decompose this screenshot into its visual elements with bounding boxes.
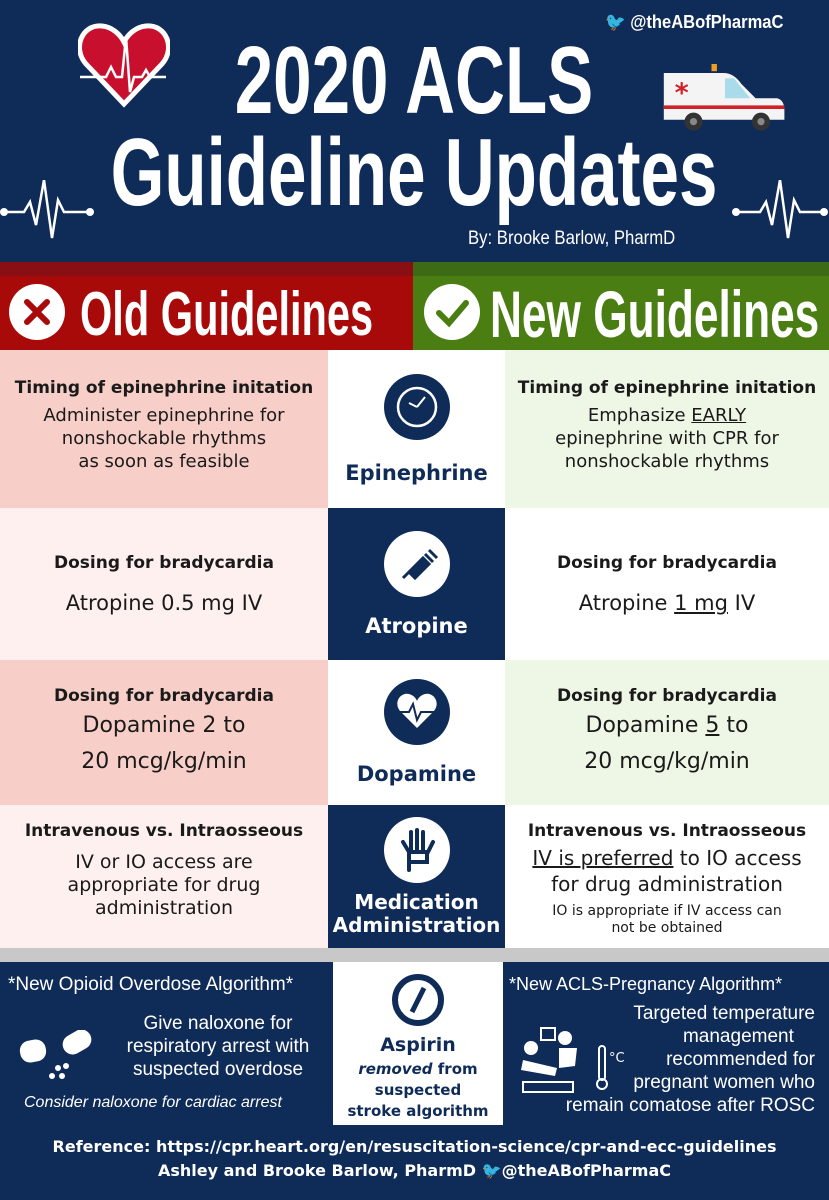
row 1: epinephrine: [0, 350, 829, 508]
row 3: dopamine: 20 mcg/kg/min: [584, 748, 750, 774]
panel: opioid: respiratory arrest with: [127, 1036, 309, 1057]
icon: ecg lines: [0, 180, 828, 238]
panel: aspirin: suspected: [375, 1081, 461, 1099]
row 4: medication administration: IV is preferred to IO access: [532, 846, 802, 870]
panel: opioid: Consider naloxone for cardiac arrest: [24, 1094, 282, 1111]
row 4: medication administration: for drug administration: [551, 872, 783, 896]
banner: old guidelines: [0, 262, 413, 350]
row 4: medication administration: Administration: [333, 912, 500, 936]
row 3: dopamine: Dopamine: [357, 762, 476, 786]
banner: new guidelines: [413, 262, 829, 350]
row 4: medication administration: IV or IO access are: [75, 851, 253, 873]
panel: aspirin: Aspirin: [380, 1034, 456, 1056]
byline: By: Brooke Barlow, PharmD: [468, 228, 675, 249]
row 4: medication administration: Intravenous vs. Intraosseous: [25, 821, 303, 841]
icon: heart: [78, 23, 170, 108]
title: Guideline Updates: [111, 119, 717, 226]
panel: pregnancy: recommended for: [666, 1049, 815, 1070]
header background: [0, 0, 829, 262]
row 1: epinephrine: Emphasize EARLY: [588, 405, 746, 426]
reference text: [53, 1137, 776, 1180]
icon: patient bed: °C: [609, 1051, 625, 1066]
panel: aspirin: removed from: [358, 1060, 478, 1078]
banner: new guidelines: New Guidelines: [490, 277, 819, 351]
bottom panel: [0, 962, 829, 1200]
panel: pregnancy: Targeted temperature: [633, 1003, 815, 1024]
row 1: epinephrine: Timing of epinephrine initation: [15, 378, 313, 398]
row 2: atropine: Dosing for bradycardia: [557, 553, 777, 573]
row 1: epinephrine: as soon as feasible: [78, 451, 250, 472]
row 2: atropine: Atropine 0.5 mg IV: [66, 591, 262, 615]
panel: pregnancy: remain comatose after ROSC: [566, 1095, 815, 1116]
reference text: Ashley and Brooke Barlow, PharmD 🐦@theABofPharmaC: [158, 1161, 671, 1180]
icon: ambulance: *: [675, 78, 689, 109]
row 2: atropine: [0, 508, 777, 660]
panel: opioid: *New Opioid Overdose Algorithm*: [8, 974, 293, 995]
row 4: medication administration: Medication: [354, 890, 479, 914]
title: [111, 27, 717, 226]
row 4: medication administration: [0, 805, 806, 948]
panel: pregnancy: [509, 974, 815, 1116]
row 1: epinephrine: Timing of epinephrine initation: [518, 378, 816, 398]
row 1: epinephrine: nonshockable rhythms: [565, 451, 769, 472]
icon: patient bed: [521, 1027, 625, 1093]
row 3: dopamine: Dosing for bradycardia: [54, 686, 274, 706]
row 1: epinephrine: nonshockable rhythms: [62, 428, 266, 449]
row 2: atropine: Atropine 1 mg IV: [579, 591, 755, 615]
icon: prohibited: [392, 974, 444, 1026]
row 3: dopamine: [0, 660, 829, 805]
row 1: epinephrine: epinephrine with CPR for: [555, 428, 779, 449]
row 4: medication administration: administration: [95, 897, 233, 919]
icon: x circle: [9, 284, 65, 340]
twitter handle: 🐦 @theABofPharmaC: [605, 12, 783, 32]
panel: aspirin: stroke algorithm: [347, 1102, 489, 1120]
row 3: dopamine: Dosing for bradycardia: [557, 686, 777, 706]
row 2: atropine: Dosing for bradycardia: [54, 553, 274, 573]
icon: check circle: [424, 284, 480, 340]
row 3: dopamine: Dopamine 2 to: [83, 712, 245, 738]
panel: opioid: [8, 974, 309, 1111]
row 3: dopamine: Dopamine 5 to: [586, 712, 748, 738]
row 2: atropine: Atropine: [365, 614, 468, 638]
reference text: Reference: https://cpr.heart.org/en/resuscitation-science/cpr-and-ecc-guidelines: [53, 1137, 776, 1156]
row 3: dopamine: 20 mcg/kg/min: [81, 748, 247, 774]
row 1: epinephrine: Epinephrine: [345, 460, 488, 484]
banner: old guidelines: Old Guidelines: [80, 280, 373, 349]
title: 2020 ACLS: [235, 27, 593, 134]
icon: ambulance: [664, 64, 784, 130]
panel: pregnancy: management: [683, 1026, 794, 1047]
icon: pills: [20, 1030, 92, 1079]
row 4: medication administration: IO is appropriate if IV access can: [552, 903, 782, 919]
panel: aspirin: [333, 962, 503, 1125]
panel: pregnancy: pregnant women who: [633, 1072, 815, 1093]
divider strip: [0, 948, 829, 962]
panel: opioid: Give naloxone for: [144, 1013, 292, 1034]
row 4: medication administration: not be obtained: [611, 920, 723, 936]
panel: opioid: suspected overdose: [133, 1059, 303, 1080]
row 4: medication administration: appropriate for drug: [68, 874, 260, 896]
row 1: epinephrine: Administer epinephrine for: [43, 405, 285, 426]
panel: pregnancy: *New ACLS-Pregnancy Algorithm*: [509, 974, 782, 994]
row 4: medication administration: Intravenous vs. Intraosseous: [528, 821, 806, 841]
